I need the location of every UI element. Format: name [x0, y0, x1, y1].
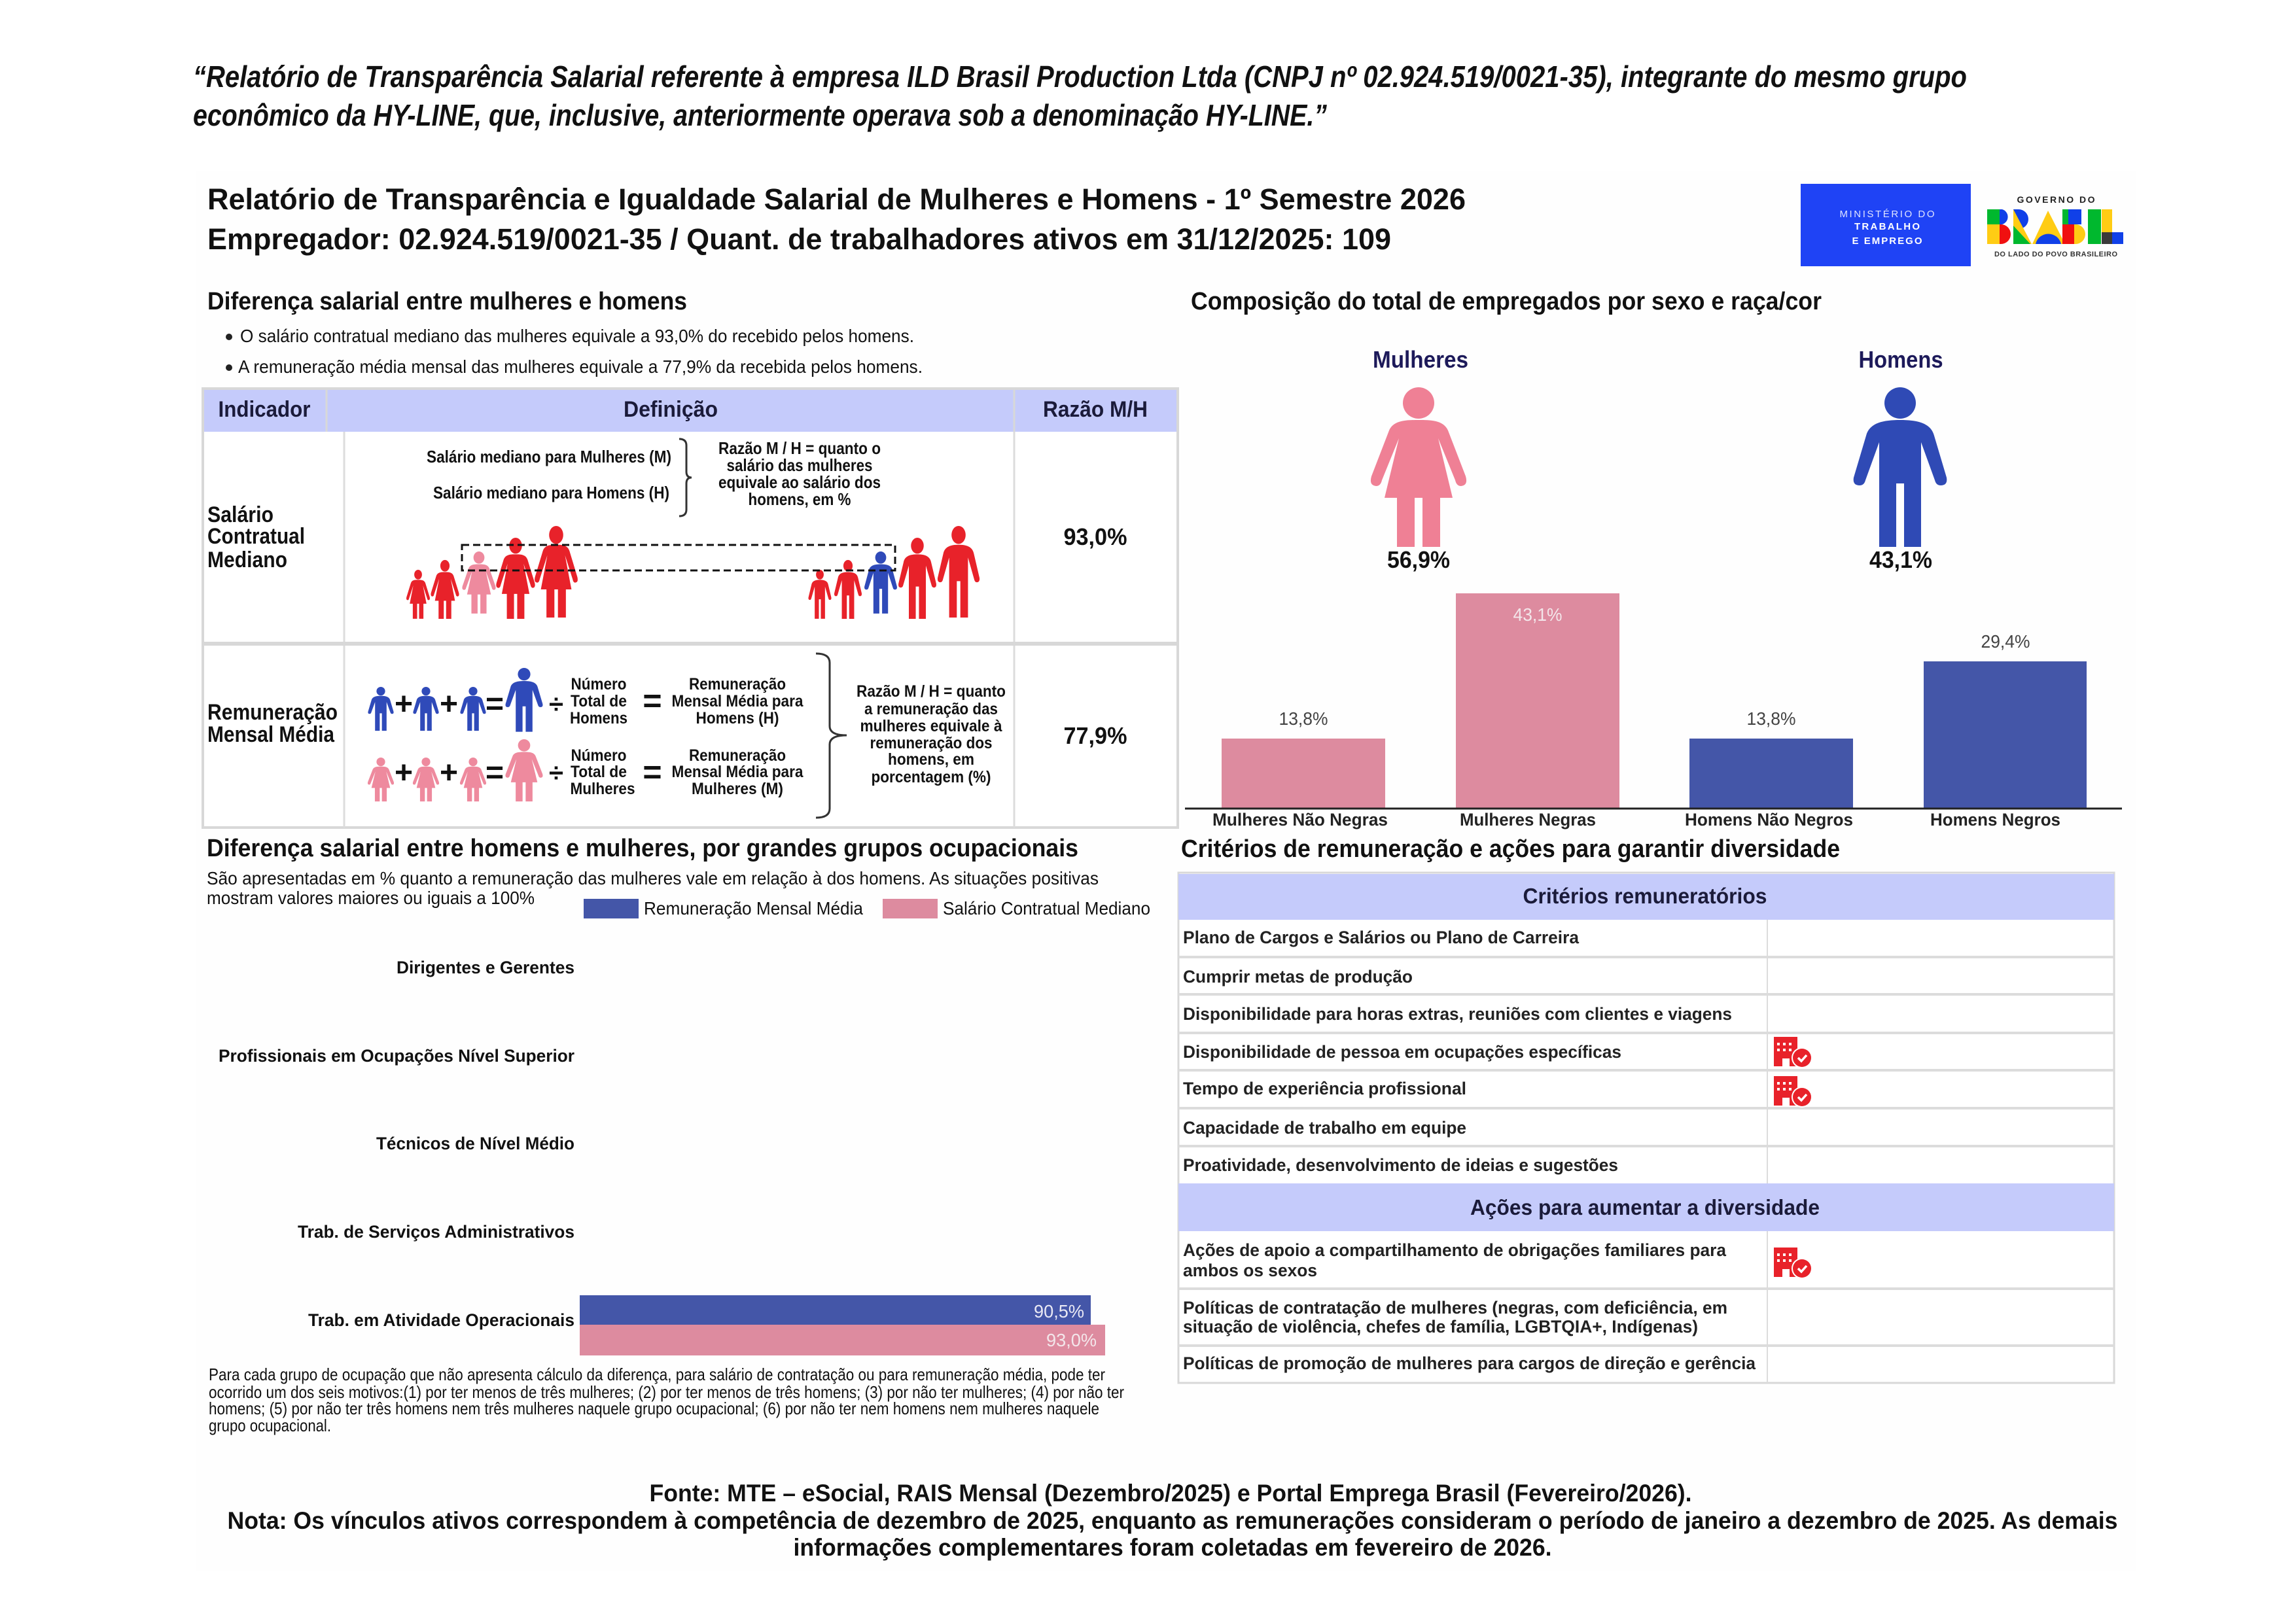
- formula: homens: ÷: [549, 690, 563, 719]
- footnote: [209, 1365, 1124, 1435]
- bar chart: sexo e raça/cor: Mulheres Não Negras: [1212, 810, 1388, 829]
- row texts: critérios: Disponibilidade de pessoa em ocupações específicas: [1183, 1042, 1621, 1062]
- formula: homens: [368, 668, 804, 732]
- formula: mulheres: Mensal Média para: [671, 763, 804, 781]
- table header: Definição: [624, 397, 718, 422]
- quote text: “Relatório de Transparência Salarial referente à empresa ILD Brasil Production Ltda (CNPJ nº 02.924.519/0021-35), integrante do mesmo grupo: [193, 60, 1967, 94]
- row label: Salário Contratual Mediano: [207, 502, 305, 572]
- icon: homens ordenados por salário: [808, 526, 980, 619]
- panel: tabela de indicadores: [203, 389, 1178, 828]
- definition text: razão remuneração: remuneração dos: [870, 734, 992, 752]
- logo: Ministério do Trabalho e Emprego: TRABALHO: [1854, 221, 1920, 232]
- row texts: ações: Ações de apoio a compartilhamento de obrigações familiares para: [1183, 1240, 1727, 1260]
- definition text: razão salário: [718, 438, 881, 509]
- heading: Composição: Composição do total de empregados por sexo e raça/cor: [1191, 288, 1822, 315]
- chart: grupos ocupacionais: Trab. de Serviços Administrativos: [298, 1222, 574, 1242]
- heading: critérios: Critérios de remuneração e ações para garantir diversidade: [1181, 835, 1840, 863]
- formula: homens: +: [440, 687, 458, 722]
- table header: [219, 397, 1148, 422]
- chart: grupos ocupacionais: 90,5%: [1034, 1301, 1084, 1321]
- brace: [679, 439, 692, 516]
- descriptive text: mostram valores maiores ou iguais a 100%: [207, 888, 535, 908]
- formula: mulheres: Mulheres (M): [692, 780, 783, 798]
- report title: Relatório de Transparência e Igualdade Salarial de Mulheres e Homens - 1º Semestre 2026: [207, 183, 1466, 216]
- footer source note: Fonte: MTE – eSocial, RAIS Mensal (Dezembro/2025) e Portal Emprega Brasil (Fevereiro/2026).: [649, 1480, 1692, 1507]
- chart: grupos ocupacionais: [219, 958, 1105, 1355]
- definition text: salário mediano: Salário mediano para Homens (H): [433, 483, 669, 502]
- dashed median box: [462, 545, 895, 570]
- bar chart: sexo e raça/cor: 13,8%: [1279, 708, 1328, 729]
- row texts: critérios: Tempo de experiência profissional: [1183, 1079, 1466, 1098]
- pictogram: Mulheres: [1371, 346, 1468, 573]
- formula: homens: Homens: [570, 709, 627, 727]
- row texts: ações: ambos os sexos: [1183, 1261, 1317, 1280]
- bullet list: A remuneração média mensal das mulheres equivale a 77,9% da recebida pelos homens.: [238, 357, 923, 377]
- chart: grupos ocupacionais: 93,0%: [1046, 1330, 1097, 1350]
- icon: building check: [1774, 1037, 1812, 1068]
- definition text: razão salário: homens, em %: [749, 489, 851, 509]
- formula: mulheres: Remuneração: [689, 746, 786, 765]
- icon: building check: [1774, 1076, 1812, 1108]
- row label: Remuneração Mensal Média: Remuneração: [207, 700, 338, 725]
- formula: mulheres: =: [486, 756, 504, 790]
- formula: mulheres: ÷: [549, 759, 563, 788]
- pictogram: Homens: [1854, 346, 1947, 573]
- row label: Salário Contratual Mediano: Mediano: [207, 548, 287, 572]
- bar chart: sexo e raça/cor: Homens Negros: [1930, 810, 2060, 829]
- row texts: critérios: Capacidade de trabalho em equipe: [1183, 1118, 1466, 1138]
- formula: mulheres: Mulheres: [571, 780, 635, 798]
- descriptive text: São apresentadas em % quanto a remuneração das mulheres vale em relação à dos homens. As situações positivas: [207, 868, 1099, 888]
- formula: mulheres: Número: [571, 746, 627, 765]
- value: 77,9%: 77,9%: [1064, 722, 1127, 749]
- pictogram: Homens: 43,1%: [1869, 546, 1932, 573]
- logo: Governo do Brasil: DO LADO DO POVO BRASILEIRO: [1994, 251, 2117, 258]
- logo: Ministério do Trabalho e Emprego: E EMPREGO: [1852, 236, 1922, 247]
- row texts: ações: Políticas de contratação de mulheres (negras, com deficiência, em: [1183, 1298, 1727, 1318]
- definition text: razão salário: equivale ao salário dos: [718, 472, 881, 492]
- quote text: econômico da HY-LINE, que, inclusive, anteriormente operava sob a denominação HY-LINE.”: [193, 98, 1327, 132]
- section header: ações: Ações para aumentar a diversidade: [1470, 1195, 1820, 1219]
- icon: mulheres ordenadas por salário: [406, 526, 578, 619]
- footer source note: [228, 1480, 2117, 1561]
- bar chart: sexo e raça/cor: 43,1%: [1513, 604, 1563, 625]
- definition text: razão remuneração: homens, em: [888, 750, 974, 769]
- chart: grupos ocupacionais: Trab. em Atividade Operacionais: [308, 1310, 574, 1330]
- legend: Remuneração Mensal Média: [644, 898, 863, 918]
- formula: homens: Total de: [571, 692, 627, 710]
- brace: [816, 654, 847, 818]
- heading: Diferença salarial: Diferença salarial entre mulheres e homens: [207, 288, 687, 315]
- table header: Indicador: [219, 397, 310, 422]
- row texts: critérios: [1183, 928, 1732, 1175]
- definition text: razão remuneração: [857, 682, 1006, 786]
- logo: Governo do Brasil: GOVERNO DO: [2017, 194, 2095, 205]
- bullet list: [226, 326, 923, 377]
- footer source note: informações complementares foram coletadas em fevereiro de 2026.: [793, 1534, 1552, 1561]
- formula: mulheres: +: [440, 756, 458, 790]
- formula: homens: Mensal Média para: [671, 692, 804, 710]
- bar chart: sexo e raça/cor: 29,4%: [1981, 631, 2030, 652]
- formula: mulheres: =: [643, 754, 662, 790]
- definition text: razão remuneração: mulheres equivale à: [860, 717, 1002, 735]
- value: 93,0%: 93,0%: [1064, 523, 1127, 550]
- chart: grupos ocupacionais: Profissionais em Ocupações Nível Superior: [219, 1046, 574, 1066]
- report title: [207, 183, 1466, 256]
- panel: critérios e ações: [1178, 873, 2114, 1383]
- legend: Salário Contratual Mediano: [943, 898, 1150, 918]
- chart: grupos ocupacionais: Dirigentes e Gerentes: [397, 958, 574, 977]
- row texts: critérios: Disponibilidade para horas extras, reuniões com clientes e viagens: [1183, 1004, 1732, 1024]
- bar chart: sexo e raça/cor: Homens Não Negros: [1685, 810, 1853, 829]
- footnote: grupo ocupacional.: [209, 1416, 331, 1435]
- legend: [584, 898, 1150, 918]
- footnote: Para cada grupo de ocupação que não apresenta cálculo da diferença, para salário de contratação ou para remuneração média, pode ter: [209, 1365, 1105, 1384]
- definition text: razão remuneração: porcentagem (%): [872, 768, 991, 786]
- footnote: ocorrido um dos seis motivos:(1) por ter menos de três mulheres; (2) por ter menos de três homens; (3) por não ter mulheres; (4) por não ter: [209, 1382, 1124, 1402]
- descriptive text: [207, 868, 1099, 908]
- definition text: salário mediano: [427, 447, 671, 502]
- formula: homens: +: [395, 687, 413, 722]
- report title: Empregador: 02.924.519/0021-35 / Quant. de trabalhadores ativos em 31/12/2025: 109: [207, 222, 1391, 256]
- pictogram: Mulheres: 56,9%: [1387, 546, 1450, 573]
- definition text: razão remuneração: a remuneração das: [864, 700, 998, 718]
- definition text: razão remuneração: Razão M / H = quanto: [857, 682, 1006, 701]
- chart: grupos ocupacionais: Técnicos de Nível Médio: [376, 1134, 574, 1153]
- row label: Remuneração Mensal Média: [207, 700, 338, 747]
- bullet list: O salário contratual mediano das mulheres equivale a 93,0% do recebido pelos homens.: [240, 326, 914, 346]
- row label: Salário Contratual Mediano: Contratual: [207, 524, 305, 549]
- formula: homens: Homens (H): [696, 709, 779, 727]
- formula: homens: =: [486, 687, 504, 722]
- logo: Governo do Brasil: [1987, 194, 2123, 258]
- row texts: critérios: Cumprir metas de produção: [1183, 967, 1413, 986]
- formula: homens: =: [643, 682, 662, 719]
- row label: Salário Contratual Mediano: Salário: [207, 502, 274, 527]
- icon: building check: [1774, 1248, 1812, 1279]
- footer source note: Nota: Os vínculos ativos correspondem à competência de dezembro de 2025, enquanto as remunerações consideram o período de janeiro a dezembro de 2025. As demais: [228, 1507, 2117, 1534]
- definition text: razão salário: Razão M / H = quanto o: [718, 438, 881, 458]
- page background panel: [196, 171, 2136, 1571]
- formula: homens: Remuneração: [689, 675, 786, 693]
- pictogram: Mulheres: Mulheres: [1373, 346, 1468, 373]
- table header: Razão M/H: [1043, 397, 1148, 422]
- formula: mulheres: [368, 739, 804, 801]
- row texts: critérios: Proatividade, desenvolvimento de ideias e sugestões: [1183, 1155, 1618, 1175]
- formula: homens: Número: [571, 675, 627, 693]
- definition text: razão salário: salário das mulheres: [726, 455, 873, 475]
- definition text: salário mediano: Salário mediano para Mulheres (M): [427, 447, 671, 466]
- logo: Ministério do Trabalho e Emprego: [1801, 184, 1971, 266]
- quote text: [193, 60, 1967, 132]
- formula: mulheres: Total de: [571, 763, 627, 781]
- formula: mulheres: +: [395, 756, 413, 790]
- logo: Ministério do Trabalho e Emprego: MINISTÉRIO DO: [1840, 209, 1934, 220]
- heading: grupos ocupacionais: Diferença salarial entre homens e mulheres, por grandes grupos ocupacionais: [207, 835, 1078, 862]
- bar chart: sexo e raça/cor: [1185, 593, 2122, 829]
- bar chart: sexo e raça/cor: 13,8%: [1747, 708, 1795, 729]
- row texts: ações: situação de violência, chefes de família, LGBTQIA+, Indígenas): [1183, 1317, 1698, 1336]
- section header: critérios remuneratórios: Critérios remuneratórios: [1523, 884, 1767, 908]
- bar chart: sexo e raça/cor: Mulheres Negras: [1460, 810, 1596, 829]
- row texts: ações: [1183, 1240, 1756, 1373]
- row texts: ações: Políticas de promoção de mulheres para cargos de direção e gerência: [1183, 1353, 1756, 1373]
- pictogram: Homens: Homens: [1858, 346, 1943, 373]
- footnote: homens; (5) por não ter três homens nem três mulheres naquele grupo ocupacional; (6) por não ter nem homens nem mulheres naquele: [209, 1399, 1099, 1418]
- row label: Remuneração Mensal Média: Mensal Média: [207, 722, 335, 747]
- row texts: critérios: Plano de Cargos e Salários ou Plano de Carreira: [1183, 928, 1580, 947]
